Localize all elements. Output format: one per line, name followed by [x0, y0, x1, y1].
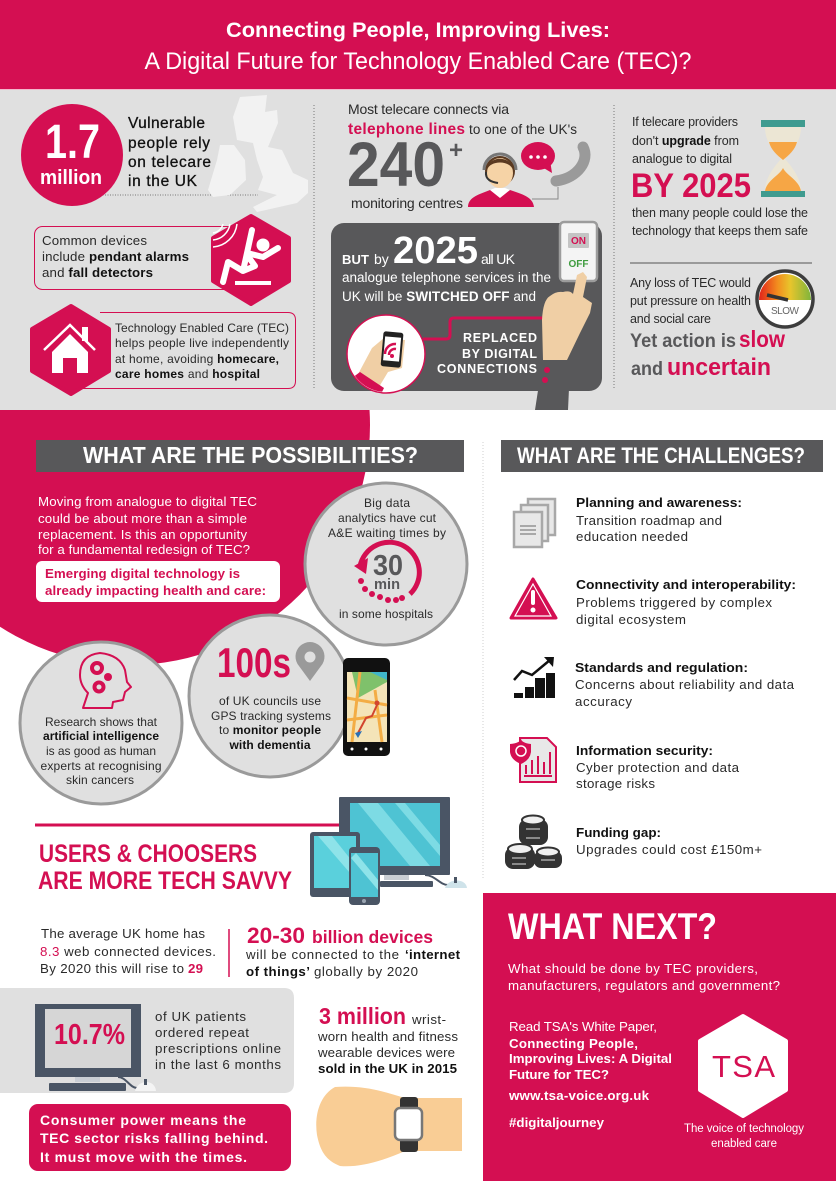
callout: consumer power: TEC sector risks falling behind.	[40, 1130, 268, 1146]
text: vulnerable people	[128, 115, 211, 190]
text: telephone lines: to one of the UK's	[469, 122, 577, 137]
text: 20-30 billion devices: ‘internet	[405, 947, 461, 962]
text: UK patients	[155, 1009, 281, 1072]
panel: online prescriptions	[0, 988, 294, 1093]
text: information security: Information security:	[576, 743, 713, 758]
icon: on off switch: OFF	[568, 259, 588, 270]
callout: technology enabled care: care homes and hospital	[115, 367, 260, 381]
text: 3 million wearables: wrist-	[411, 1012, 446, 1027]
text: voice of technology	[684, 1123, 804, 1150]
callout: consumer power: It must move with the times.	[40, 1149, 247, 1165]
text: read white paper: www.tsa-voice.org.uk	[508, 1088, 650, 1103]
panel: 2025 switch off: UK will be SWITCHED OFF and	[342, 289, 536, 304]
panel: big data circle: 30	[373, 550, 403, 582]
logo: TSA hexagon	[700, 1016, 786, 1116]
icon: falling person hexagon	[213, 216, 289, 304]
text: planning and awareness: Transition roadmap and	[576, 513, 722, 528]
callout: emerging digital technology: already impacting health and care:	[45, 583, 266, 598]
panel: what next	[483, 893, 836, 1181]
text: replaced by digital connections: BY DIGITAL	[462, 347, 537, 361]
heading: what are the possibilities: WHAT ARE THE POSSIBILITIES?	[83, 442, 418, 468]
icon: wrist with smartwatch	[316, 1087, 462, 1166]
text: planning and awareness: Planning and awareness:	[576, 495, 742, 510]
connector line	[423, 318, 545, 339]
title banner: Connecting People, Improving Lives:	[226, 18, 610, 42]
text: standards and regulation: accuracy	[575, 694, 632, 709]
text: average UK home: 29	[188, 961, 203, 976]
text: telephone lines	[348, 101, 577, 211]
icon: hourglass	[761, 120, 805, 197]
heading: what are the possibilities	[36, 440, 464, 472]
panel: GPS tracking circle: 100s	[217, 639, 291, 686]
title banner	[0, 0, 836, 90]
text: what should be done	[508, 961, 780, 993]
callout: emerging digital technology: Emerging digital technology is	[45, 566, 240, 581]
text: UK patients: ordered repeat	[155, 1025, 249, 1040]
panel: 2025 switch off: all UK	[481, 251, 516, 267]
icon: hand holding smartphone	[347, 315, 425, 396]
panel: artificial intelligence circle	[20, 642, 182, 804]
text: read white paper: Future for TEC?	[509, 1067, 609, 1082]
text: upgrade warning: analogue to digital	[632, 152, 732, 166]
panel: artificial intelligence circle: artificial intelligence	[43, 729, 159, 743]
text: 20-30 billion devices: billion devices	[312, 927, 433, 947]
text: slow and uncertain: slow	[739, 326, 785, 352]
text: read white paper: Improving Lives: A Digital	[509, 1051, 672, 1066]
stat: by 2025: BY 2025	[631, 167, 751, 205]
stat: 1.7 million: million	[40, 167, 102, 189]
text: funding gap	[576, 825, 762, 857]
panel: big data circle	[305, 483, 467, 645]
icon: head with gears	[80, 653, 131, 708]
text: slow and uncertain	[630, 326, 785, 381]
icon: slow gauge	[757, 271, 813, 327]
panel: 2025 switch off	[331, 222, 602, 410]
panel: 2025 switch off: BUT	[342, 252, 369, 267]
text: read white paper: Connecting People,	[509, 1036, 638, 1051]
panel: GPS tracking circle: with dementia	[228, 738, 311, 752]
text: upgrade warning: If telecare providers	[632, 115, 738, 129]
text: UK patients: in the last 6 months	[155, 1057, 281, 1072]
stat: 1.7 million: 1.7	[45, 116, 100, 169]
text: connectivity and interoperability	[576, 577, 796, 627]
callout: common devices	[34, 226, 254, 290]
divider between columns	[482, 442, 484, 880]
text: UK patients: of UK patients	[155, 1009, 246, 1024]
panel: 2025 switch off: by	[374, 251, 389, 267]
callout: consumer power: Consumer power means the	[40, 1112, 246, 1128]
icon: house hexagon	[32, 306, 109, 394]
text: read white paper	[508, 1019, 672, 1130]
text: vulnerable people: on telecare	[128, 154, 211, 171]
text: 20-30 billion devices	[245, 923, 461, 979]
text: loss of TEC: put pressure on health	[630, 294, 751, 308]
text: standards and regulation: Standards and regulation:	[575, 660, 748, 675]
text: voice of technology: enabled care	[711, 1138, 777, 1150]
text: 20-30 billion devices: will be connected to the	[245, 947, 399, 962]
panel: 2025 switch off: 2025	[393, 230, 478, 272]
text: connectivity and interoperability: digital ecosystem	[576, 612, 686, 627]
text: loss of TEC: Any loss of TEC would	[630, 276, 751, 290]
text: what should be done: What should be done by TEC providers,	[508, 961, 758, 976]
text: 20-30 billion devices: of things’	[246, 964, 310, 979]
callout: technology enabled care: Technology Enabled Care (TEC)	[115, 321, 289, 335]
text: vulnerable people: Vulnerable	[128, 115, 205, 132]
panel: big data circle: Big data	[364, 496, 410, 510]
icon: secure data document	[510, 738, 556, 782]
panel: artificial intelligence circle: experts at recognising	[40, 759, 162, 773]
icon: on off switch	[560, 222, 597, 281]
text: upgrade warning	[632, 115, 808, 238]
panel: GPS tracking circle: GPS tracking systems	[211, 709, 331, 723]
icon: call centre operator and phone	[468, 142, 585, 207]
stat: 1.7 million	[21, 104, 123, 206]
text: upgrade warning: then many people could lose the	[632, 206, 808, 220]
text: voice of technology: The voice of technology	[684, 1123, 804, 1135]
icon: monitor with 10.7%: 10.7%	[54, 1019, 125, 1051]
callout: common devices: Common devices	[42, 233, 147, 248]
callout: technology enabled care	[80, 312, 296, 388]
icon: 30 minute arrow	[354, 542, 419, 603]
text: information security: storage risks	[576, 776, 655, 791]
panel: users and choosers	[35, 797, 467, 905]
panel: GPS tracking circle: of UK councils use	[219, 694, 321, 708]
text: loss of TEC: and social care	[630, 312, 711, 326]
text: UK patients: prescriptions online	[155, 1041, 281, 1056]
text: connectivity and interoperability: Problems triggered by complex	[576, 595, 772, 610]
heading: users and choosers	[38, 840, 292, 895]
icon: rising chart	[514, 657, 555, 698]
text: slow and uncertain: and	[631, 359, 663, 380]
icon: warning triangle	[511, 579, 556, 618]
text: upgrade warning: technology that keeps them safe	[632, 224, 808, 238]
panel: possibilities background	[0, 410, 370, 664]
text: telephone lines: telephone lines	[348, 121, 465, 138]
text: standards and regulation	[575, 660, 795, 709]
heading: users and choosers: USERS & CHOOSERS	[39, 840, 257, 868]
text: moving from analogue: for a fundamental redesign of TEC?	[38, 542, 250, 557]
panel: telecare overview	[0, 90, 836, 410]
text: 3 million wearables: sold in the UK in 2015	[318, 1061, 458, 1076]
text: information security	[576, 743, 740, 791]
text: replaced by digital connections	[437, 331, 537, 376]
text: average UK home	[40, 926, 216, 976]
callout: technology enabled care: at home, avoiding homecare,	[115, 352, 279, 366]
text: replaced by digital connections: REPLACED	[463, 331, 537, 345]
text: connectivity and interoperability: Connectivity and interoperability:	[576, 577, 796, 592]
heading: users and choosers: ARE MORE TECH SAVVY	[38, 867, 292, 895]
text: slow and uncertain: uncertain	[667, 354, 771, 381]
text: vulnerable people: people rely	[128, 135, 210, 152]
text: upgrade warning: don't upgrade from	[632, 134, 739, 148]
text: 3 million wearables: worn health and fitness	[317, 1029, 458, 1044]
logo: TSA hexagon: TSA	[712, 1049, 775, 1084]
title banner: A Digital Future for Technology Enabled Care (TEC)?	[144, 48, 692, 75]
stat: 240+: 240	[347, 130, 445, 200]
text: standards and regulation: Concerns about reliability and data	[575, 677, 795, 692]
panel: 2025 switch off: analogue telephone services in the	[342, 270, 551, 285]
text: average UK home: By 2020 this will rise to	[40, 961, 184, 976]
text: 20-30 billion devices: globally by 2020	[314, 964, 418, 979]
text: 3 million wearables: 3 million	[319, 1003, 406, 1029]
icon: smartphone with map	[343, 658, 390, 756]
text: moving from analogue	[38, 494, 257, 557]
callout: common devices: and fall detectors	[42, 265, 153, 280]
text: 3 million wearables: wearable devices were	[317, 1045, 455, 1060]
icon: pointing hand	[535, 272, 592, 410]
text: planning and awareness	[576, 495, 742, 544]
icon: monitor tablet and phone	[310, 797, 467, 905]
text: read white paper: Read TSA's White Paper,	[509, 1019, 657, 1034]
text: telephone lines: Most telecare connects via	[348, 101, 509, 117]
icon: slow gauge: SLOW	[771, 306, 800, 317]
icon: monitor with 10.7%	[35, 1004, 156, 1091]
panel: GPS tracking circle	[189, 615, 351, 777]
text: 3 million wearables	[317, 1003, 458, 1076]
text: replaced by digital connections: CONNECTIONS	[437, 362, 537, 376]
panel: GPS tracking circle: to monitor people	[219, 723, 321, 737]
text: planning and awareness: education needed	[576, 529, 688, 544]
panel: artificial intelligence circle: skin cancers	[66, 773, 134, 787]
panel: big data circle: analytics have cut	[338, 511, 437, 525]
map of UK	[208, 95, 308, 212]
text: moving from analogue: could be about more than a simple	[38, 511, 247, 526]
text: funding gap: Funding gap:	[576, 825, 661, 840]
text: funding gap: Upgrades could cost £150m+	[576, 842, 762, 857]
panel: artificial intelligence circle: Research shows that	[45, 715, 158, 729]
panel: artificial intelligence circle: is as good as human	[46, 744, 156, 758]
text: what should be done: manufacturers, regulators and government?	[508, 978, 780, 993]
callout: consumer power	[29, 1104, 291, 1171]
panel: big data circle: A&E waiting times by	[328, 526, 446, 540]
text: read white paper: #digitaljourney	[509, 1115, 605, 1130]
callout: common devices: include pendant alarms	[42, 249, 189, 264]
text: vulnerable people: in the UK	[128, 173, 198, 190]
stat: 240+: +	[449, 137, 463, 164]
callout: emerging digital technology	[36, 561, 280, 602]
text: loss of TEC	[630, 276, 751, 326]
text: 20-30 billion devices: 20-30	[247, 923, 305, 948]
icon: documents	[514, 499, 555, 547]
text: moving from analogue: replacement. Is this an opportunity	[38, 527, 247, 542]
panel: big data circle: in some hospitals	[339, 607, 433, 621]
icon: on off switch: ON	[571, 236, 586, 247]
panel: big data circle: min	[374, 576, 400, 593]
text: information security: Cyber protection and data	[576, 760, 740, 775]
text: moving from analogue: Moving from analogue to digital TEC	[38, 494, 257, 509]
text: slow and uncertain: Yet action is	[630, 331, 736, 352]
text: telephone lines: monitoring centres	[351, 195, 463, 211]
panel: what next: WHAT NEXT?	[508, 906, 717, 947]
panel: challenges	[501, 440, 823, 869]
callout: technology enabled care: helps people live independently	[115, 336, 289, 350]
text: average UK home: 8.3 web connected devices.	[40, 944, 216, 959]
text: average UK home: The average UK home has	[41, 926, 205, 941]
icon: stacks of coins	[505, 816, 562, 869]
icon: location pin	[296, 642, 324, 681]
